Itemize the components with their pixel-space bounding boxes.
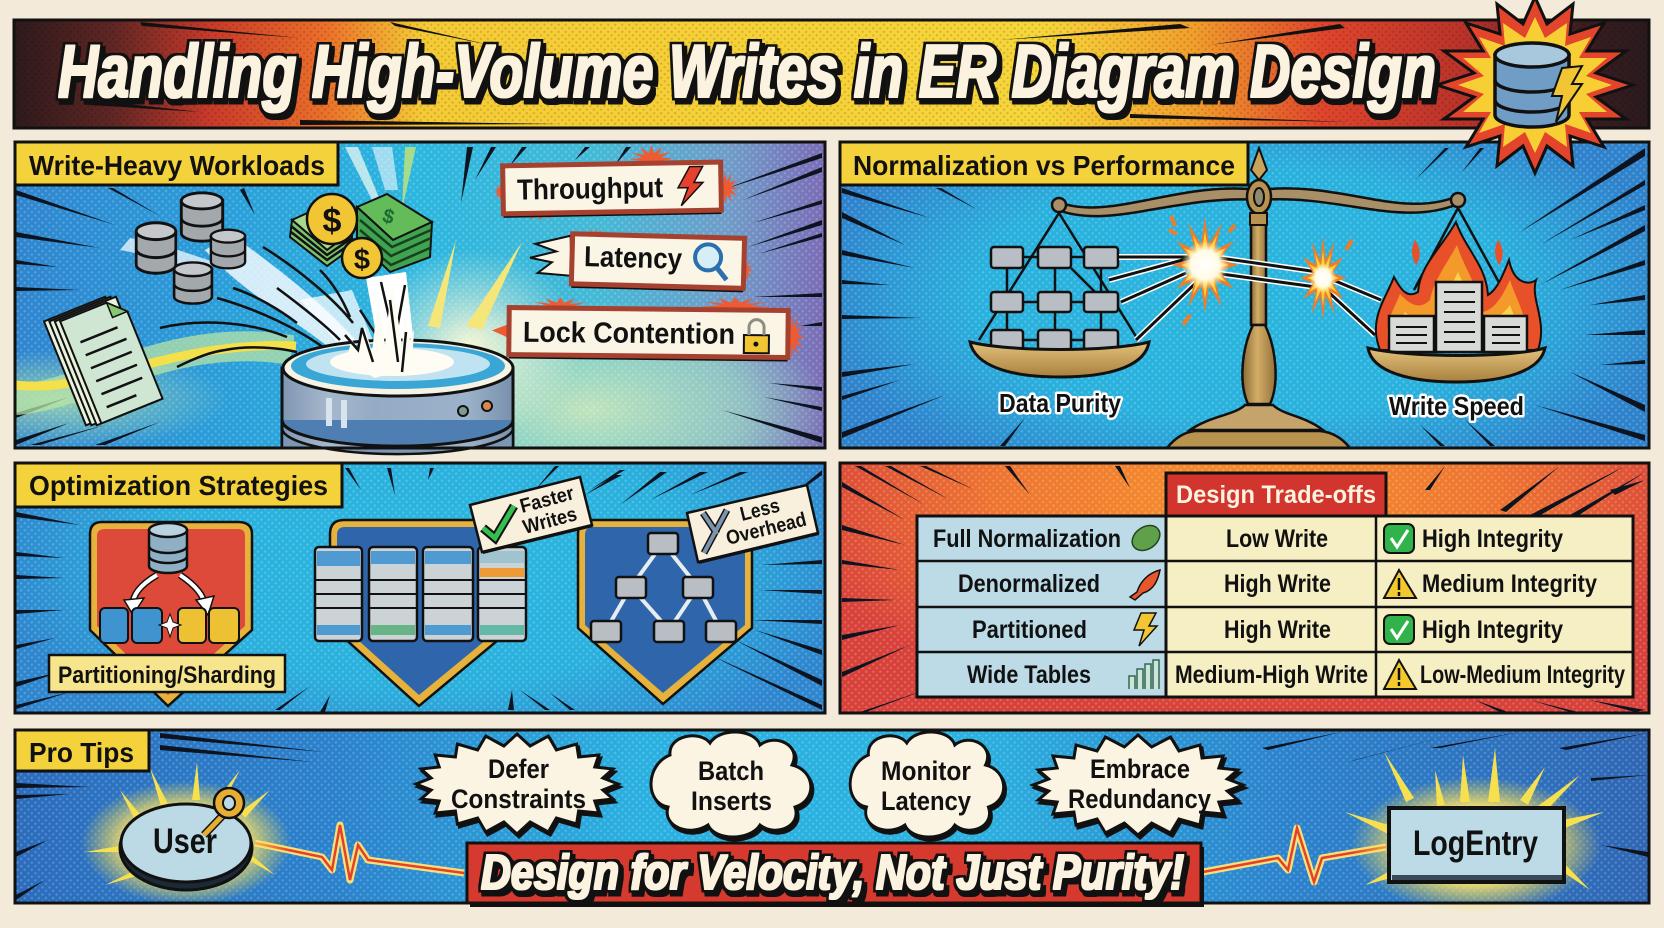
row: denormalized: Medium Integrity bbox=[1422, 570, 1597, 598]
heading: normalization vs performance: Normalization vs Performance bbox=[853, 150, 1235, 181]
tip: defer constraints: Defer bbox=[488, 754, 549, 784]
panel: optimization strategies bbox=[15, 463, 825, 713]
spark bursts bbox=[1169, 216, 1352, 325]
heading: optimization strategies bbox=[15, 463, 342, 507]
tip: embrace redundancy bbox=[1033, 735, 1245, 838]
row: partitioned: Partitioned bbox=[972, 616, 1087, 644]
row: denormalized: Denormalized bbox=[958, 570, 1100, 598]
ECG line right bbox=[1203, 828, 1386, 882]
row: full normalization: Low Write bbox=[1226, 525, 1328, 553]
badge: latency: Latency bbox=[584, 241, 682, 276]
data stream: yellow ribbon bbox=[15, 322, 297, 400]
left pan strings bbox=[979, 213, 1137, 340]
tip: batch inserts: Inserts bbox=[691, 786, 772, 816]
entity: log entry: LogEntry bbox=[1413, 824, 1538, 863]
ECG line left core bbox=[255, 825, 464, 880]
tip: batch inserts: Batch bbox=[698, 756, 764, 786]
icon: money: $ bbox=[323, 202, 342, 240]
tip: monitor latency: Latency bbox=[881, 786, 971, 816]
tip: monitor latency bbox=[850, 732, 1006, 840]
heading: pro tips bbox=[15, 730, 149, 771]
table heading: Design Trade-offs bbox=[1176, 481, 1376, 509]
icon: big database cylinder bbox=[282, 280, 513, 454]
panel border bbox=[840, 142, 1649, 448]
icon: small database cylinders bbox=[136, 193, 245, 304]
tip: monitor latency: Monitor bbox=[881, 756, 971, 786]
tip: defer constraints bbox=[416, 734, 620, 837]
panel border bbox=[15, 142, 825, 448]
table heading bbox=[1166, 473, 1386, 516]
server bars on fire bbox=[1389, 282, 1527, 352]
tree connectors bbox=[606, 543, 721, 630]
row: denormalized: High Write bbox=[1224, 570, 1331, 598]
light beams bbox=[345, 147, 522, 330]
tree nodes bbox=[591, 533, 736, 642]
icon: money: $ bbox=[354, 244, 370, 276]
flames bbox=[1376, 222, 1541, 350]
panel border bbox=[840, 463, 1649, 713]
label: partitioning/sharding bbox=[49, 655, 285, 692]
row: wide tables: Medium-High Write bbox=[1175, 661, 1368, 689]
badge: throughput: Throughput bbox=[517, 172, 664, 207]
note: less overhead: Less bbox=[738, 495, 782, 526]
entity: log entry bbox=[1345, 748, 1604, 913]
note: faster writes: Faster bbox=[518, 482, 577, 518]
row: full normalization: High Integrity bbox=[1422, 525, 1563, 553]
row: full normalization bbox=[933, 520, 1563, 556]
label: data purity: Data Purity bbox=[999, 388, 1121, 418]
tip: batch inserts bbox=[651, 732, 813, 840]
ECG line left bbox=[255, 825, 464, 880]
label: write speed: Write Speed bbox=[1389, 391, 1524, 421]
illustration: balance scale bbox=[970, 148, 1545, 448]
note: faster writes: Writes bbox=[521, 503, 579, 539]
table: design trade-offs bbox=[917, 473, 1633, 697]
badge: throughput bbox=[493, 144, 740, 221]
icon: source database bbox=[149, 523, 187, 573]
scale stand bbox=[1167, 148, 1350, 448]
panel border bbox=[15, 730, 1649, 903]
heading: normalization vs performance bbox=[840, 142, 1248, 185]
panel: pro tips bbox=[15, 730, 1649, 913]
row: full normalization: Full Normalization bbox=[933, 525, 1121, 553]
row: wide tables: Wide Tables bbox=[967, 661, 1091, 689]
note: less overhead: Overhead bbox=[724, 509, 809, 550]
shard blocks bbox=[100, 608, 239, 643]
row: partitioned: High Integrity bbox=[1422, 616, 1563, 644]
tip: embrace redundancy: Redundancy bbox=[1068, 784, 1211, 814]
icon: document stack bbox=[44, 291, 163, 429]
entity: user bbox=[81, 762, 291, 905]
left pan bbox=[970, 342, 1149, 377]
badge: lock contention: Lock Contention bbox=[523, 317, 735, 351]
scale beam bbox=[1052, 180, 1465, 225]
tip: defer constraints: Constraints bbox=[451, 784, 586, 814]
row: partitioned bbox=[972, 613, 1563, 646]
row: denormalized bbox=[958, 570, 1597, 600]
badge: lock contention bbox=[492, 294, 804, 362]
icon: database cylinder bbox=[1495, 43, 1582, 127]
panel: design trade-offs bbox=[840, 463, 1649, 713]
note: less overhead bbox=[687, 485, 819, 564]
icon: database explosion burst bbox=[1437, 0, 1633, 173]
icon: money: $ bbox=[380, 205, 396, 229]
heading: pro tips: Pro Tips bbox=[29, 737, 134, 768]
panel border bbox=[15, 463, 825, 713]
row: partitioned: High Write bbox=[1224, 616, 1331, 644]
slogan banner: Design for Velocity, Not Just Purity! bbox=[481, 846, 1184, 900]
badge: latency bbox=[529, 227, 754, 293]
table cells bbox=[917, 516, 1633, 697]
arrows: split to shards bbox=[124, 575, 214, 615]
title banner bbox=[14, 20, 1649, 128]
shield: partitioning bbox=[90, 522, 252, 706]
heading: optimization strategies: Optimization Strategies bbox=[29, 470, 328, 501]
panel: write-heavy workloads bbox=[15, 142, 825, 454]
heading: write-heavy workloads: Write-Heavy Workloads bbox=[29, 150, 325, 181]
ECG line right core bbox=[1203, 828, 1386, 882]
shield: wide table bbox=[315, 520, 526, 706]
entity: user: User bbox=[153, 822, 217, 861]
label: partitioning/sharding: Partitioning/Sharding bbox=[58, 662, 276, 689]
right pan bbox=[1368, 348, 1545, 382]
icon: money bbox=[290, 194, 432, 278]
shield: tree index bbox=[578, 520, 752, 704]
note: faster writes bbox=[470, 477, 593, 554]
arrows through sparks bbox=[1109, 257, 1381, 340]
wide table columns bbox=[315, 547, 526, 641]
white jets into database bbox=[120, 235, 414, 365]
row: wide tables bbox=[967, 660, 1625, 689]
panel: normalization vs performance bbox=[840, 142, 1649, 448]
right pan strings bbox=[1414, 208, 1502, 290]
heading: write-heavy workloads bbox=[15, 142, 338, 185]
ER diagram nodes bbox=[991, 247, 1118, 350]
tip: embrace redundancy: Embrace bbox=[1090, 754, 1190, 784]
